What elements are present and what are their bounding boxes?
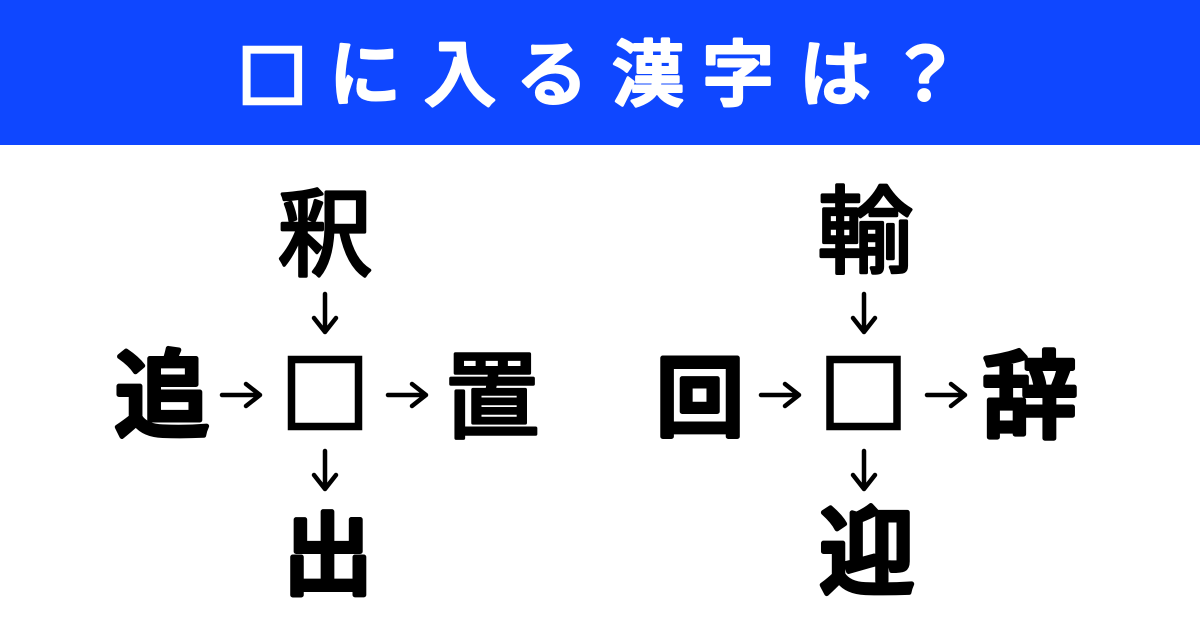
left puzzle (114, 183, 540, 607)
arrow: right center right (927, 384, 965, 406)
title text: 入 (424, 36, 496, 116)
left kanji left: 追 (114, 344, 210, 450)
bottom kanji left: 出 (283, 507, 373, 607)
right kanji left: 置 (444, 345, 540, 451)
title text (245, 21, 961, 123)
arrow: left center right (388, 384, 426, 406)
arrow: right bottom down (853, 451, 875, 489)
arrow: right top down (853, 294, 875, 332)
arrow: left top down (314, 294, 336, 332)
center box left (292, 360, 358, 426)
right puzzle (656, 180, 1078, 607)
title text: る (516, 36, 588, 116)
top kanji left: 釈 (277, 183, 373, 289)
center box right (830, 360, 897, 426)
title text: 漢 (612, 36, 684, 116)
left kanji right: 回 (656, 349, 744, 448)
title text: 字 (702, 36, 774, 116)
title text: ？ (889, 36, 961, 116)
title text: に (329, 36, 401, 116)
right kanji right: 辞 (982, 345, 1078, 451)
title banner (0, 0, 1200, 145)
arrows (222, 294, 965, 489)
title text: □ (245, 21, 301, 123)
arrow: right left right (761, 384, 799, 406)
bottom kanji right: 迎 (819, 501, 915, 607)
arrow: left bottom down (314, 451, 336, 489)
top kanji right: 輸 (817, 180, 913, 286)
arrow: left left right (222, 384, 260, 406)
title text: は (799, 36, 871, 116)
